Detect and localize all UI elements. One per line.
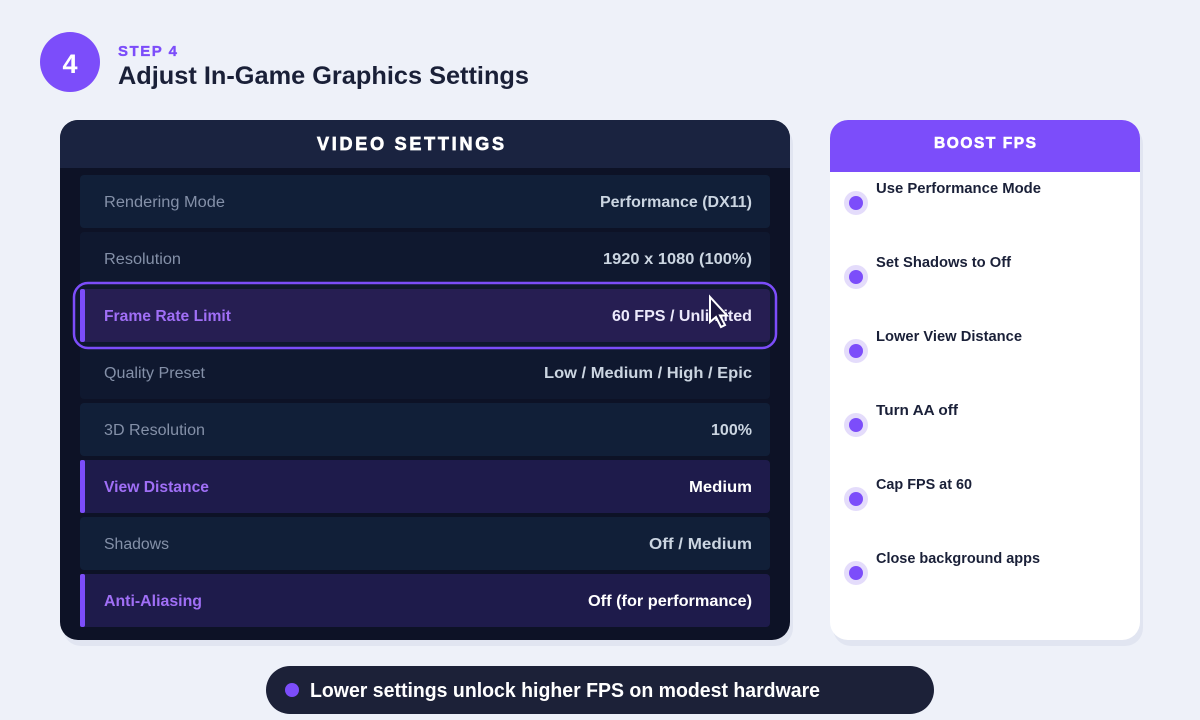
tip: lower view distance: Lower View Distance [876,329,1022,345]
panel: video settings [60,120,793,646]
icon: step number badge: 4 [62,49,78,79]
row: view distance: View Distance [104,479,209,496]
row: shadows: Shadows [104,536,169,553]
icon: mouse cursor [710,297,727,327]
tip: turn aa off: Turn AA off [876,403,958,419]
tip: use performance mode: Use Performance Mode [876,181,1041,197]
row: quality preset [80,346,770,399]
panel: boost fps [830,120,1143,646]
tip: close background apps: Close background apps [876,551,1040,567]
row: 3D resolution [80,403,770,456]
title: Adjust In-Game Graphics Settings [118,62,529,90]
tip: set shadows to off [844,255,1011,289]
tip: close background apps [844,551,1040,585]
row: frame rate limit (highlighted): Frame Rate Limit [104,308,231,325]
callout: bottom takeaway pill: Lower settings unlock higher FPS on modest hardware [310,680,820,702]
tip: cap fps at 60: Cap FPS at 60 [876,477,972,493]
row: resolution: 1920 x 1080 (100%) [603,251,752,268]
boost fps heading: BOOST FPS [934,135,1036,152]
row: resolution: Resolution [104,251,181,268]
row: rendering mode [80,175,770,228]
row: anti-aliasing [80,574,770,627]
row: frame rate limit (highlighted) [74,283,776,348]
row: shadows [80,517,770,570]
tip: lower view distance [844,329,1022,363]
tip: use performance mode [844,181,1041,215]
row: rendering mode: Performance (DX11) [600,194,752,211]
step label: STEP 4 [118,43,178,60]
row: shadows: Off / Medium [649,536,752,553]
tip: turn aa off [844,403,958,437]
row: view distance: Medium [689,479,752,496]
row: resolution [80,232,770,285]
header: step badge and title [40,32,529,92]
row: quality preset: Quality Preset [104,365,206,382]
row: rendering mode: Rendering Mode [104,194,225,211]
boost fps heading [830,120,1140,172]
row: view distance [80,460,770,513]
row: quality preset: Low / Medium / High / Epic [544,365,752,382]
callout: bottom takeaway pill [266,666,934,714]
video settings heading: VIDEO SETTINGS [317,134,504,154]
row: anti-aliasing: Off (for performance) [588,593,752,610]
icon: step number badge [40,32,100,92]
tip: cap fps at 60 [844,477,972,511]
video settings heading [60,120,790,168]
row: anti-aliasing: Anti-Aliasing [104,593,202,610]
row: frame rate limit (highlighted): 60 FPS / Unlimited [612,308,752,325]
row: 3D resolution: 3D Resolution [104,422,205,439]
row: 3D resolution: 100% [711,422,752,439]
tip: set shadows to off: Set Shadows to Off [876,255,1011,271]
